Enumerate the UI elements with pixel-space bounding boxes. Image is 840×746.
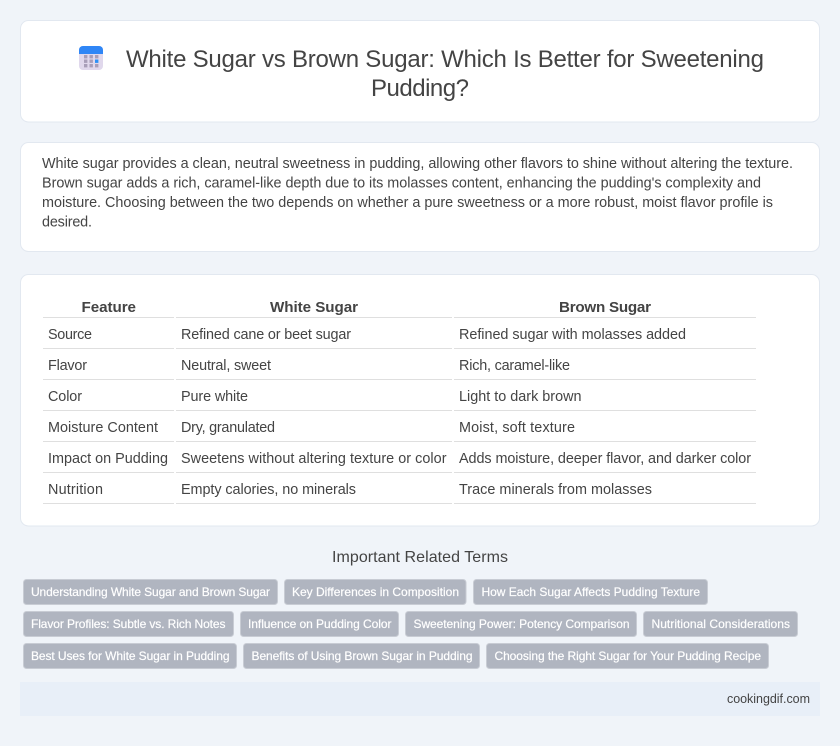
row: source <box>48 327 686 343</box>
tag: How Each Sugar Affects Pudding Texture <box>482 585 700 599</box>
table header: Brown Sugar <box>559 299 651 316</box>
tag <box>244 644 480 668</box>
row: nutrition: Nutrition <box>48 482 103 498</box>
title <box>126 46 764 102</box>
table header: Feature <box>82 299 136 316</box>
row: color: Light to dark brown <box>459 389 582 405</box>
tag <box>284 580 466 604</box>
row: source: Refined cane or beet sugar <box>181 327 351 343</box>
row: moisture content: Dry, granulated <box>181 420 275 436</box>
table header: White Sugar <box>270 299 358 316</box>
heading: related terms: Important Related Terms <box>332 549 508 566</box>
tag: Sweetening Power: Potency Comparison <box>414 617 630 631</box>
text block: introduction <box>42 156 793 230</box>
tag <box>406 612 636 636</box>
footer: cookingdif.com <box>727 692 810 706</box>
row: impact on pudding: Sweetens without altering texture or color <box>181 451 447 467</box>
panel: header <box>20 20 820 122</box>
row: moisture content: Moist, soft texture <box>459 420 575 436</box>
table header <box>82 299 651 316</box>
tag <box>240 612 398 636</box>
row: flavor <box>48 358 570 374</box>
tag <box>474 580 708 604</box>
tag <box>486 644 768 668</box>
tag: Nutritional Considerations <box>652 617 790 631</box>
row: color: Color <box>48 389 82 405</box>
row: source: Source <box>48 327 92 343</box>
text block: introduction: Brown sugar adds a rich, caramel-like depth due to its molasses content, enhancing the pudding's complexity and <box>42 176 761 192</box>
row: moisture content <box>48 420 575 436</box>
row: color <box>48 389 582 405</box>
row: nutrition <box>48 482 652 498</box>
row: impact on pudding: Impact on Pudding <box>48 451 168 467</box>
row: moisture content: Moisture Content <box>48 420 158 436</box>
panel: introduction <box>20 142 820 252</box>
tag <box>644 612 798 636</box>
text block: introduction: White sugar provides a clean, neutral sweetness in pudding, allowing other flavors to shine without altering the texture. <box>42 156 793 172</box>
text block: introduction: desired. <box>42 214 92 230</box>
tag: Key Differences in Composition <box>292 585 459 599</box>
row: nutrition: Trace minerals from molasses <box>459 482 652 498</box>
row: nutrition: Empty calories, no minerals <box>181 482 356 498</box>
tag <box>24 612 234 636</box>
tag: Understanding White Sugar and Brown Sugar <box>31 585 270 599</box>
row: impact on pudding: Adds moisture, deeper flavor, and darker color <box>459 451 751 467</box>
tag: Influence on Pudding Color <box>248 617 392 631</box>
panel: comparison table <box>20 274 820 526</box>
row: flavor: Neutral, sweet <box>181 358 271 374</box>
row: color: Pure white <box>181 389 248 405</box>
title: Pudding? <box>371 75 469 102</box>
related term tags <box>24 580 798 668</box>
title: White Sugar vs Brown Sugar: Which Is Better for Sweetening <box>126 46 764 73</box>
tag: Flavor Profiles: Subtle vs. Rich Notes <box>31 617 226 631</box>
tag: Choosing the Right Sugar for Your Pudding Recipe <box>494 649 761 663</box>
tag: Best Uses for White Sugar in Pudding <box>31 649 230 663</box>
row: flavor: Flavor <box>48 358 87 374</box>
row: impact on pudding <box>48 451 751 467</box>
row: flavor: Rich, caramel-like <box>459 358 570 374</box>
text block: introduction: moisture. Choosing between the two depends on whether a pure sweetness or a more robust, moist flavor profile is <box>42 195 773 211</box>
row: source: Refined sugar with molasses added <box>459 327 686 343</box>
footer <box>20 682 820 716</box>
tag <box>24 644 236 668</box>
tag <box>24 580 278 604</box>
table rules <box>43 317 756 504</box>
tag: Benefits of Using Brown Sugar in Pudding <box>252 649 472 663</box>
icon: calendar <box>79 46 103 70</box>
